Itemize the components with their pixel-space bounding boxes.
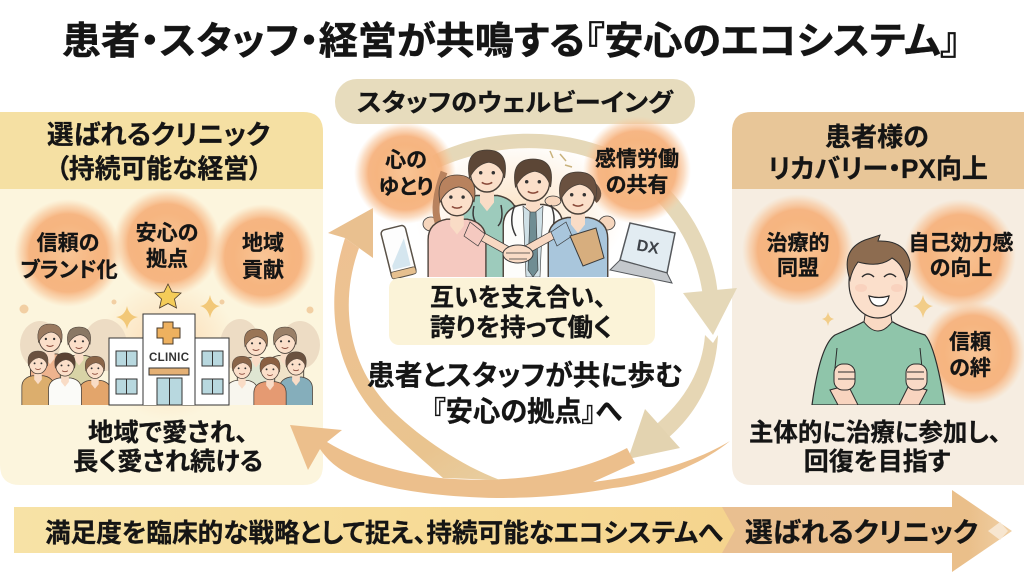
bubble: 心のゆとり: 心の [385,149,427,172]
panel header: clinic [0,112,323,189]
panel header: patient: 患者様の [825,122,929,152]
bubble labels: 信頼の絆: 信頼 [949,331,991,354]
text: 主体的に治療に参加し [749,419,1001,476]
bubble labels: 自己効力感: の向上 [930,257,992,280]
title: 患者・スタッフ・経営が共鳴する『安心のエコシステム』 [62,21,960,63]
callout: mutual support: 互いを支え合い、 [430,284,606,312]
pill: staff wellbeing heading: スタッフのウェルビーイング [357,88,674,117]
panel: patient [732,112,1024,485]
bubble: 信頼のブランド化: 信頼の [37,232,99,255]
bubble: 感情労働の共有: の共有 [606,174,668,197]
icon: DX laptop [610,223,675,283]
shoulder hands [422,216,435,232]
text: 地域で愛され: 地域で愛され、 [88,419,248,447]
pill: staff wellbeing heading [335,79,695,124]
bubble: 感情労働の共有 [583,116,691,224]
bubble: 安心の拠点: 拠点 [146,248,188,271]
bubble: 安心の拠点: 安心の [136,222,198,245]
panel header: clinic: （持続可能な経営） [56,154,262,184]
glow: behind care team [415,140,625,290]
icon: DX laptop: DX [635,237,661,258]
bubble: 安心の拠点 [113,189,221,297]
bubble: 治療的同盟: 同盟 [777,257,819,280]
arrow: staff to patient (lower beige) [628,335,718,459]
illustration: smiling patient [812,235,945,405]
linked arms [483,236,551,252]
bubble: 心のゆとり [354,122,456,224]
bubble: 自己効力感 [904,199,1024,405]
bubble: 治療的同盟: 治療的 [766,232,830,255]
bubble: 信頼のブランド化 [14,199,122,307]
text: centre message: 『安心の拠点』へ [432,396,623,427]
bottom arrow banner: 選ばれるクリニック [745,518,978,548]
bubble labels: 自己効力感 [908,231,1014,280]
panel header: clinic: 選ばれるクリニック [47,120,270,150]
bubble: 信頼のブランド化: ブランド化 [20,258,118,282]
bubble labels: 自己効力感: 自己効力感 [908,231,1014,255]
bubble: 治療的同盟 [742,194,854,306]
arrow: patient sweep to clinic [290,425,730,498]
bubble: 信頼の絆 [921,301,1024,405]
panel header: patient [732,112,1024,189]
arrow: staff to patient (upper beige) [432,134,737,335]
text: 地域で愛され: 長く愛され続ける [73,448,263,476]
text: centre message [367,359,683,427]
illustration: clinic and community: CLINIC [149,352,189,364]
bubble: 地域貢献 [210,204,316,310]
bottom arrow banner [14,490,1012,572]
callout: mutual support: 誇りを持って働く [430,314,612,342]
bubble: 感情労働の共有: 感情労働 [595,147,679,171]
illustration: care team [422,150,616,277]
panel: clinic [0,112,323,485]
bottom arrow banner: 満足度を臨床的な戦略として捉え、持続可能なエコシステムへ [45,518,724,548]
bubble: 地域貢献: 地域 [242,232,284,255]
bubble labels: 信頼の絆 [949,331,991,380]
text: centre message: 患者とスタッフが共に歩む [367,359,683,391]
text: 主体的に治療に参加し: 主体的に治療に参加し、 [749,419,1001,447]
callout: mutual support [389,278,655,345]
text: 地域で愛され [73,419,263,476]
arrow: ring to staff (left orange) [328,208,500,480]
icon: smartphone [380,225,417,279]
panel header: patient: リカバリー・PX向上 [768,154,988,184]
bubble labels: 信頼の絆: の絆 [949,357,991,380]
bubble: 心のゆとり: ゆとり [379,176,433,199]
text: 主体的に治療に参加し: 回復を目指す [804,448,950,476]
illustration: clinic and community [20,283,320,408]
bubble: 地域貢献: 貢献 [242,259,284,282]
